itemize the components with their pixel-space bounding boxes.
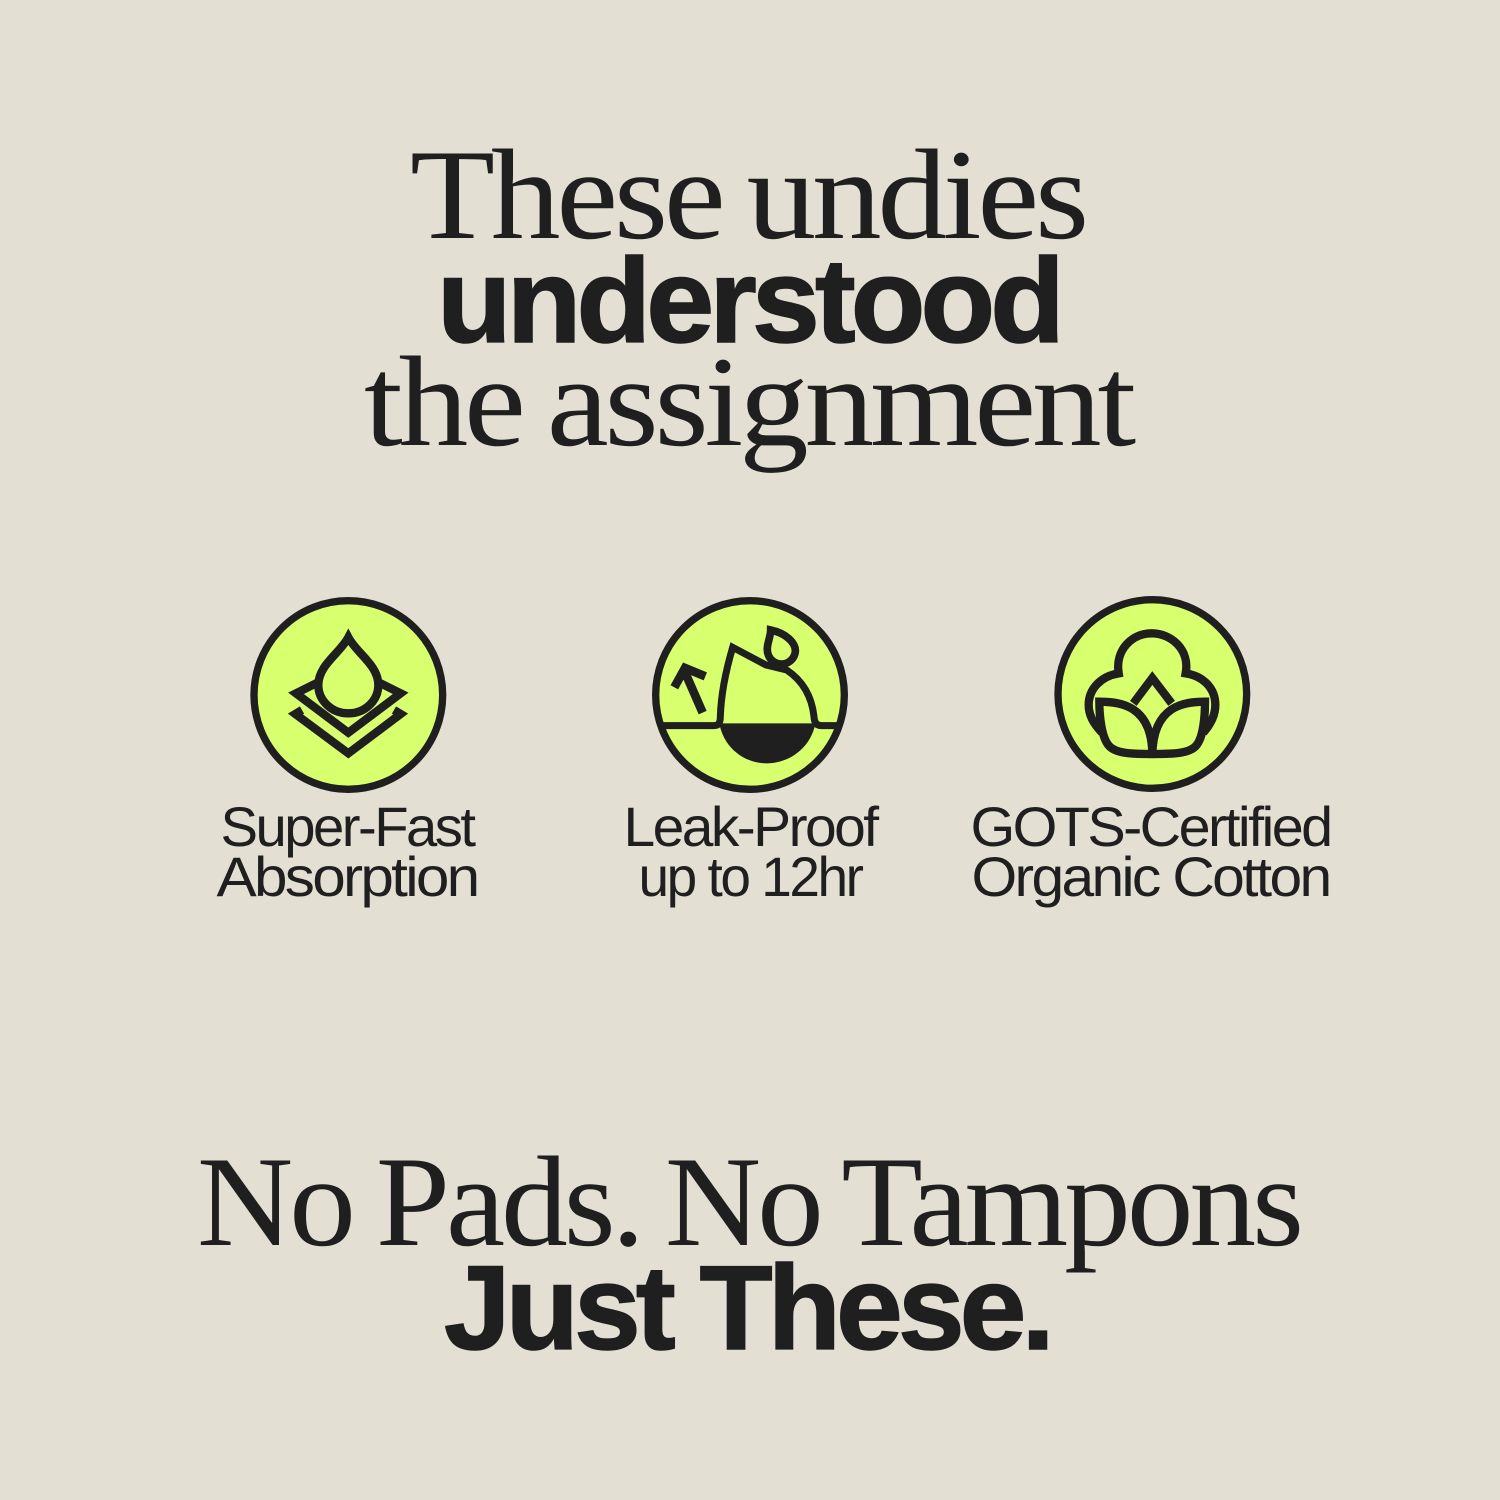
- icon: leak-proof underwear: [656, 601, 844, 789]
- label: GOTS-Certified Organic Cotton: [970, 795, 1330, 908]
- closing tagline: Just These.: [444, 1241, 1050, 1375]
- title: These undies: [410, 123, 1085, 266]
- closing tagline: [197, 1130, 1300, 1375]
- closing tagline: No Pads. No Tampons: [197, 1130, 1300, 1273]
- title: [364, 123, 1136, 473]
- label: Super-Fast Absorption: Absorption: [216, 845, 478, 908]
- icon: organic cotton boll: [1058, 600, 1247, 788]
- label: Leak-Proof up to 12hr: up to 12hr: [638, 845, 863, 908]
- title: understood: [437, 234, 1060, 368]
- label: GOTS-Certified Organic Cotton: Organic Cotton: [972, 845, 1330, 908]
- title: the assignment: [364, 330, 1136, 473]
- label: GOTS-Certified Organic Cotton: GOTS-Certified: [970, 795, 1330, 858]
- label: Leak-Proof up to 12hr: Leak-Proof: [624, 795, 880, 858]
- icon: absorption drop on layers: [254, 601, 443, 789]
- label: Leak-Proof up to 12hr: [624, 795, 880, 908]
- label: Super-Fast Absorption: [216, 795, 478, 908]
- label: Super-Fast Absorption: Super-Fast: [220, 795, 476, 858]
